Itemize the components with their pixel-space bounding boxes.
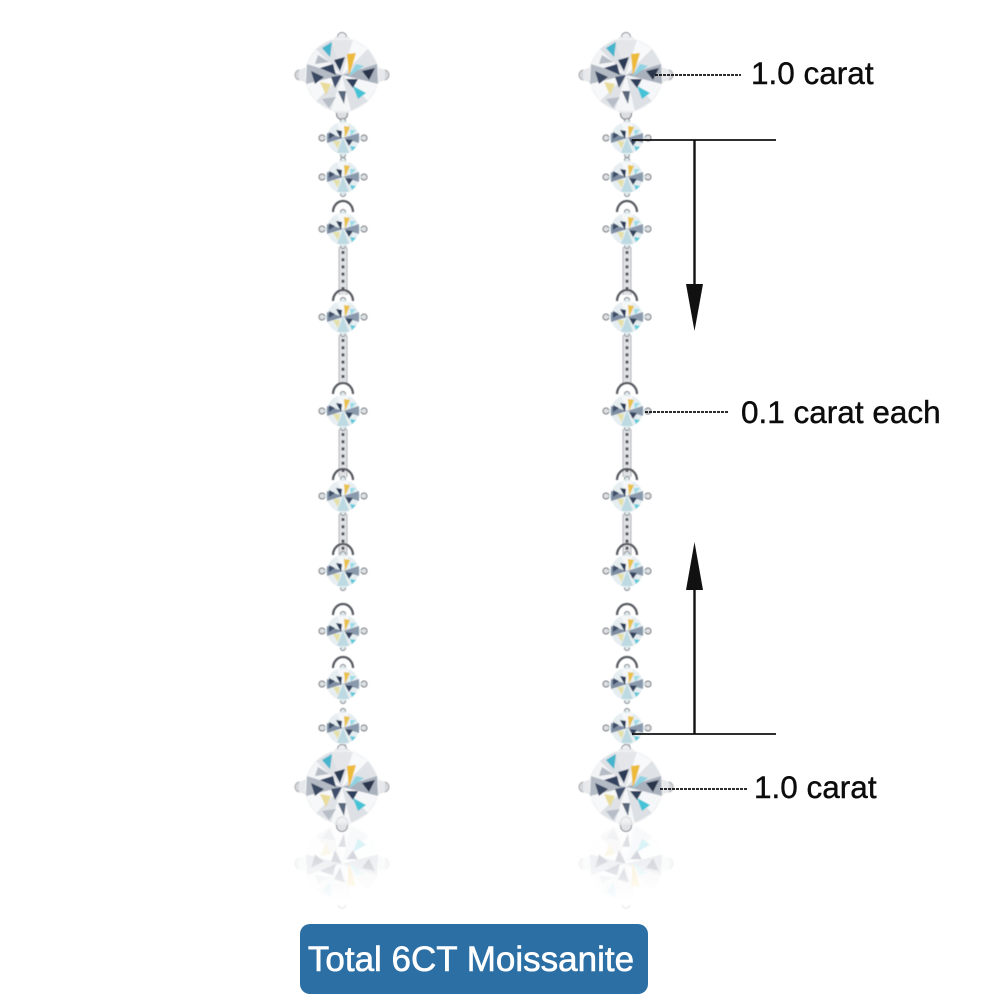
right earring bbox=[571, 32, 681, 908]
total badge: Total 6CT Moissanite bbox=[308, 940, 634, 979]
bracket arrow: up from lower small stone bbox=[632, 542, 776, 734]
callout: middle stones 0.1 carat each: 0.1 carat each bbox=[741, 394, 941, 430]
total badge bbox=[300, 924, 648, 994]
bracket arrow: down from upper small stone bbox=[632, 140, 776, 331]
left earring bbox=[287, 32, 397, 908]
callout: bottom stone 1.0 carat: 1.0 carat bbox=[754, 769, 877, 805]
callout: top stone 1.0 carat: 1.0 carat bbox=[751, 55, 874, 91]
